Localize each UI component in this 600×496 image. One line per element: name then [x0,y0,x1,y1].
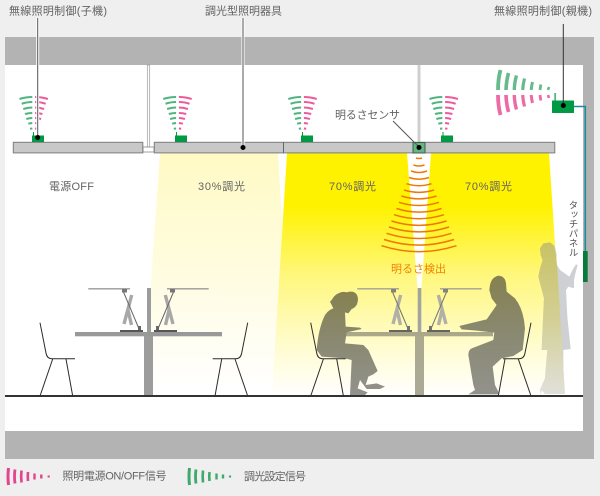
wireless child unit 4 [441,132,453,142]
brightness sensor [413,142,425,153]
suspension pole left [147,65,150,147]
cable to touch panel [574,106,585,252]
parent unit signal: dimming [498,70,549,90]
room interior [5,65,583,431]
right wall [583,37,594,459]
left desk chairs [40,323,248,396]
light cone: 30% dimming [143,153,292,396]
left desk with lamps [75,288,222,395]
legend text: power signal: 照明電源ON/OFF信号 [62,469,166,483]
leader: dimmable fixture [240,18,246,150]
label: dimmable fixture: 調光型照明器具 [205,4,282,18]
label: touch panel: タッチパネル [566,200,578,257]
dimmable light fixtures row [154,142,555,153]
wireless child unit 2 [175,132,187,142]
ceiling [5,37,594,65]
touch panel [583,251,588,282]
label: 70 percent right: 70%調光 [465,179,512,193]
light fixture 1 [13,142,143,153]
label: 30 percent: 30%調光 [198,179,245,193]
signal waves: fixture 1 [20,97,48,129]
fixture connector [143,147,154,152]
brightness detection waves [382,158,456,252]
right desk chair: seated woman [311,323,346,396]
standing woman silhouette [538,242,578,394]
signal waves: fixture 3 [288,97,317,129]
wireless child unit 1 [32,132,44,142]
parent unit signal: power [498,95,549,115]
suspension pole centre [418,65,420,142]
leader: parent unit [561,24,566,108]
under-floor band [5,431,583,459]
wireless child unit 3 [301,132,313,142]
legend text: dimming signal: 調光設定信号 [244,469,306,483]
label: brightness detection: 明るさ検出 [391,262,446,276]
legend icon: power signal [8,468,49,485]
right desk with lamps [345,288,493,395]
leader: brightness sensor [393,121,422,150]
legend icon: dimming signal [189,468,230,485]
label: 70 percent left: 70%調光 [329,179,376,193]
signal waves: fixture 4 [430,97,458,129]
seated man silhouette [459,276,525,394]
signal waves: fixture 2 [163,97,192,129]
wireless parent unit [552,93,574,113]
right desk chair: seated man [498,323,531,396]
label: power off: 電源OFF [49,179,94,193]
floor line [5,395,583,397]
label: brightness sensor: 明るさセンサ [335,109,400,122]
seated woman silhouette [317,292,385,395]
leader: child unit [35,18,40,140]
light cone: 70% dimming [272,153,565,396]
label: child unit: 無線照明制御(子機) [9,4,107,18]
label: parent unit: 無線照明制御(親機) [494,4,592,18]
